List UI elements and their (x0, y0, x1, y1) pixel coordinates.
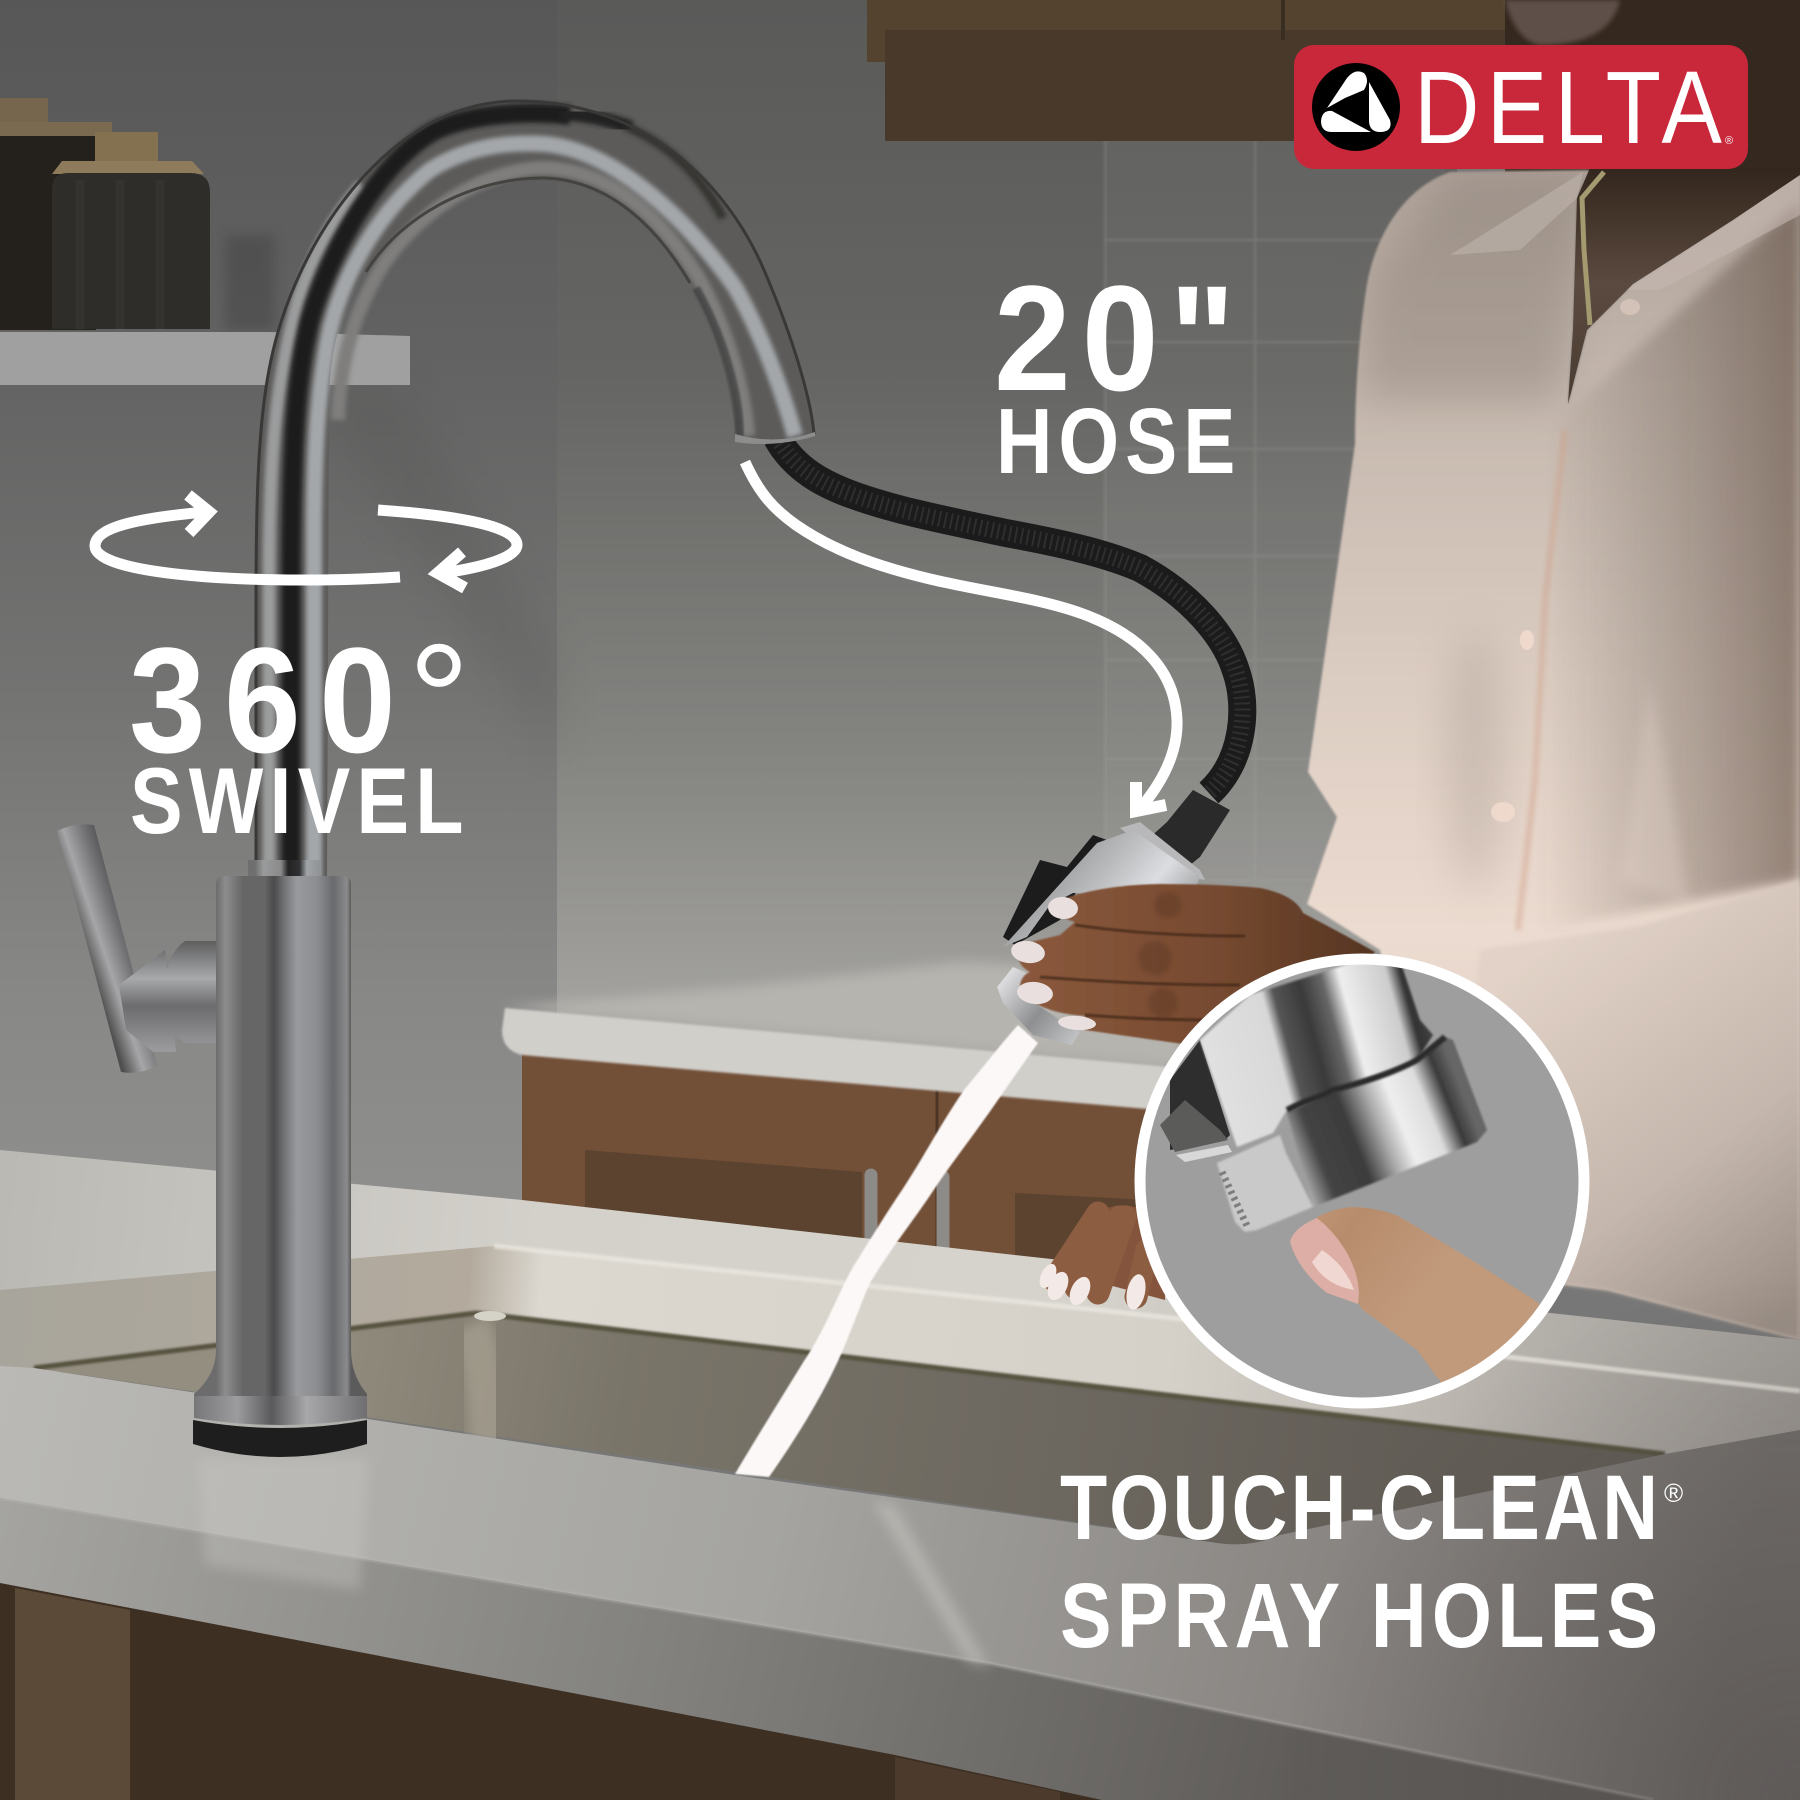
middle wall (557, 0, 1457, 1250)
collar left (1450, 172, 1583, 255)
arch inner shade (366, 178, 690, 283)
arrow right (378, 510, 517, 573)
dark band tail (625, 126, 723, 218)
black base (193, 1420, 367, 1457)
faucet body (194, 876, 367, 1418)
swivel arrows (95, 495, 517, 588)
label: touch-clean spray holes (1060, 1457, 1683, 1668)
dark band fade (560, 113, 631, 128)
sprayer nozzle ring (997, 967, 1080, 1045)
inner lighter band (338, 168, 748, 436)
tile wall (1105, 140, 1445, 1000)
counter bright edge (494, 1246, 1800, 1391)
outer left highlight (269, 185, 362, 880)
sprayer body (1003, 830, 1200, 947)
paddle in callout (1170, 1040, 1230, 1150)
rear counter edge (502, 1008, 1170, 1111)
label: 20 inch hose: HOSE (996, 390, 1235, 494)
counter back lip (0, 1150, 1800, 1460)
person skin top right (1505, 0, 1800, 172)
counter front edge (0, 1498, 1653, 1800)
wire clip (1176, 1145, 1232, 1162)
chin (1505, 0, 1620, 45)
door gap (936, 1088, 938, 1260)
connector collar (1120, 822, 1205, 880)
knuckle shading (1138, 892, 1182, 1018)
elbow (119, 950, 176, 1052)
nails (1010, 896, 1096, 1031)
label: 20 inch hose: 20" (994, 255, 1235, 422)
upper hand (1010, 884, 1375, 1050)
faucet reflection (198, 1458, 368, 1590)
blouse shadow center (1445, 630, 1505, 890)
left wall (0, 0, 557, 1250)
black paddle (1003, 835, 1107, 945)
shelf (0, 332, 410, 385)
sink corner highlight (470, 1325, 490, 1500)
spout tip (735, 432, 815, 444)
front edge highlight (0, 1498, 1653, 1800)
sink drain glint (474, 1311, 506, 1321)
label: 360 swivel: 360 (129, 617, 396, 784)
neck (1568, 168, 1800, 404)
sink rim (34, 1313, 1665, 1454)
water stream (735, 1025, 1038, 1477)
sink basin (34, 1311, 1665, 1552)
cabinet panel right (1015, 1193, 1150, 1290)
lower hand (1036, 1205, 1165, 1311)
label: 360 swivel: ° (408, 612, 470, 785)
logo mark (1312, 63, 1400, 151)
blouse (1307, 170, 1800, 1340)
spout inner shade (696, 288, 740, 436)
wall shadow under shelf (300, 385, 557, 760)
label: touch-clean spray holes: ® (1664, 1478, 1683, 1508)
handle connector (119, 941, 218, 1052)
upper cabinet (867, 0, 1525, 141)
base flare (194, 1396, 367, 1425)
fingers (1054, 1213, 1147, 1297)
label: touch-clean spray holes: SPRAY HOLES (1060, 1565, 1658, 1668)
upper cylinder (1200, 955, 1433, 1147)
cabinet rail (895, 1757, 1060, 1800)
cabinet panel left (585, 1150, 862, 1260)
lever handle (57, 824, 157, 1073)
circle ring (1140, 959, 1584, 1403)
rear cabinet (522, 1050, 1150, 1290)
wordmark: DELTA (1414, 50, 1722, 165)
outer edge (256, 101, 814, 880)
placket line (1518, 430, 1565, 930)
hose (777, 438, 1242, 793)
handles (871, 1175, 943, 1250)
finger (1300, 1207, 1545, 1385)
hose arrow (745, 462, 1177, 811)
spout tube (255, 100, 815, 880)
highlight band (314, 143, 795, 880)
label: 360 swivel (129, 612, 470, 854)
dark band (291, 113, 570, 880)
rear counter top (502, 962, 1180, 1067)
faucet (57, 100, 1242, 1457)
counter front top (0, 1366, 1800, 1800)
finger gaps (1040, 925, 1245, 1020)
bottom right vignette (1200, 1280, 1800, 1800)
nails (1036, 1261, 1149, 1311)
registered mark: ® (1725, 135, 1733, 147)
label: 360 swivel: SWIVEL (130, 749, 463, 854)
light fold on torso (1620, 680, 1690, 905)
sprayer in hand (997, 790, 1230, 1045)
blouse shadow right (1540, 200, 1800, 930)
arrow left (95, 512, 400, 580)
wall shadow behind jars (225, 235, 275, 330)
hand back (1085, 1205, 1165, 1300)
Delta logo (1294, 45, 1748, 169)
jar back (0, 98, 112, 330)
spray nub (1217, 1135, 1313, 1232)
cabinet stile (15, 1588, 130, 1800)
buttons (1491, 299, 1640, 822)
collar neck (248, 860, 321, 878)
water reflection (872, 1500, 990, 1668)
collar right (1620, 175, 1800, 290)
sleeve (1450, 880, 1800, 1340)
fingernail (1290, 1218, 1359, 1304)
necklace (1582, 172, 1604, 325)
barrel (165, 941, 218, 1043)
label: touch-clean spray holes: TOUCH-CLEAN (1060, 1457, 1658, 1560)
lower ring (1287, 1037, 1487, 1207)
jar front (52, 132, 210, 329)
blouse top shade (1360, 170, 1590, 400)
lower cabinet (0, 1583, 1102, 1800)
hose connector (1120, 790, 1230, 880)
counter sloped face (0, 1246, 1800, 1454)
hand and fingers shape (1018, 884, 1375, 1050)
ring groove (1287, 1037, 1445, 1110)
spray holes (1222, 1172, 1248, 1228)
callout circle: touch-clean detail (1140, 955, 1584, 1403)
